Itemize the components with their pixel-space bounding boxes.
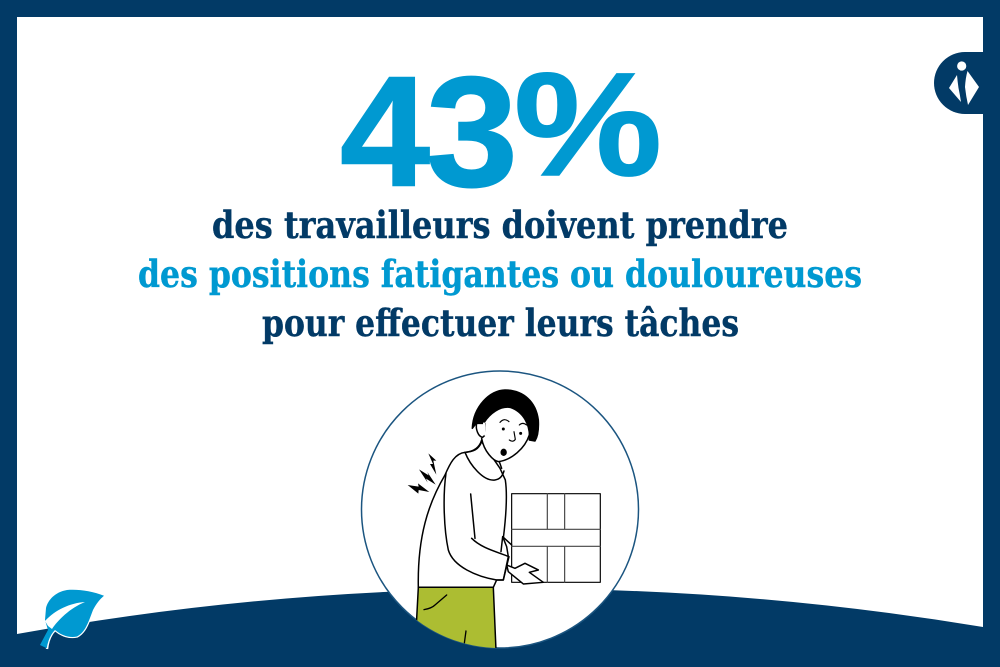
text line 1: des travailleurs doivent prendre <box>212 203 788 247</box>
illustration circle <box>362 371 638 648</box>
ear <box>476 423 485 437</box>
hand <box>507 563 543 584</box>
neck and face <box>484 443 495 460</box>
logo: leaf <box>40 590 104 649</box>
headline statistic <box>340 43 662 220</box>
body and sweater <box>418 442 508 587</box>
logo: badge <box>934 52 983 114</box>
eyes, brows, nose, mouth <box>500 420 527 456</box>
headline statistic: % <box>514 43 662 207</box>
pain bolts <box>408 453 436 494</box>
text line 2: des positions fatigantes ou douloureuses <box>138 252 862 296</box>
text line 3: pour effectuer leurs tâches <box>262 301 739 345</box>
hair <box>472 390 538 441</box>
headline statistic: 3 <box>426 45 518 220</box>
illustration: worker carrying box with back pain <box>408 390 600 650</box>
box <box>512 494 600 582</box>
headline statistic: 4 <box>340 44 430 220</box>
arm behind box <box>501 537 512 552</box>
pants <box>415 587 496 650</box>
bottom navy wave <box>17 589 983 667</box>
